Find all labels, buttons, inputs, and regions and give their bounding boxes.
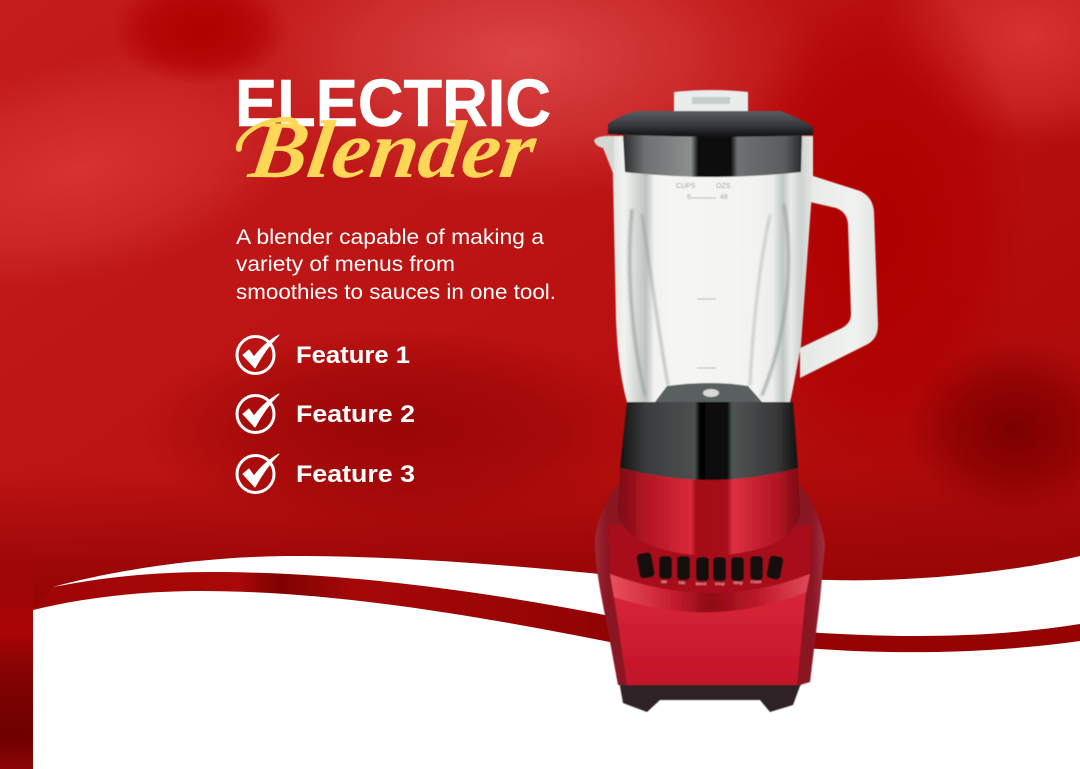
title [235,66,551,195]
feature 2: Feature 2 [296,401,415,428]
glass jar [594,135,813,402]
feature 3: Feature 3 [296,461,415,488]
motor neck [620,402,798,480]
spout [594,136,614,176]
jar handle [800,175,878,378]
dark inner ring [623,135,802,177]
blade [703,389,719,397]
button labels: Stir [661,579,668,584]
measurement marks: 6 [687,194,691,201]
lid [608,111,813,137]
title line: Blender: Blender [244,104,542,195]
button labels: Whip [733,580,743,585]
measurement marks: CUPS [676,183,696,190]
feature 2 [237,394,415,432]
measurement marks: 48 [720,194,728,201]
feature 1: Feature 1 [296,342,410,369]
button labels: Mix [679,580,685,585]
button labels [661,579,761,586]
title line: Electric: ELECTRIC [235,66,551,141]
control panel [636,552,784,586]
base sheen band [610,574,810,613]
button labels: Chop [715,581,726,586]
feature 1 [237,335,410,374]
white wave shapes [33,556,1080,769]
base front deck [608,525,812,594]
feet [618,675,810,712]
feature list [237,335,415,492]
lid cap [674,90,748,113]
red wave band: left [33,572,620,645]
measurement marks: OZS [716,183,731,190]
description [236,226,556,304]
jar bottom [655,383,762,402]
measurement marks [676,183,731,368]
base front panel [614,592,806,685]
description: A blender capable of making a [236,226,544,249]
icon: check circle [237,454,279,492]
description: variety of menus from [236,253,455,276]
red wave band: right [806,624,1080,652]
icon: check circle [237,335,279,374]
collar [618,468,800,556]
base body [595,485,825,685]
button labels: Clean [751,579,761,584]
glass ribs [630,205,788,395]
blender product illustration [594,90,878,712]
icon: check circle [237,394,279,432]
feature 3 [237,454,415,492]
description: smoothies to sauces in one tool. [236,281,556,304]
button labels: Blend [696,581,706,586]
